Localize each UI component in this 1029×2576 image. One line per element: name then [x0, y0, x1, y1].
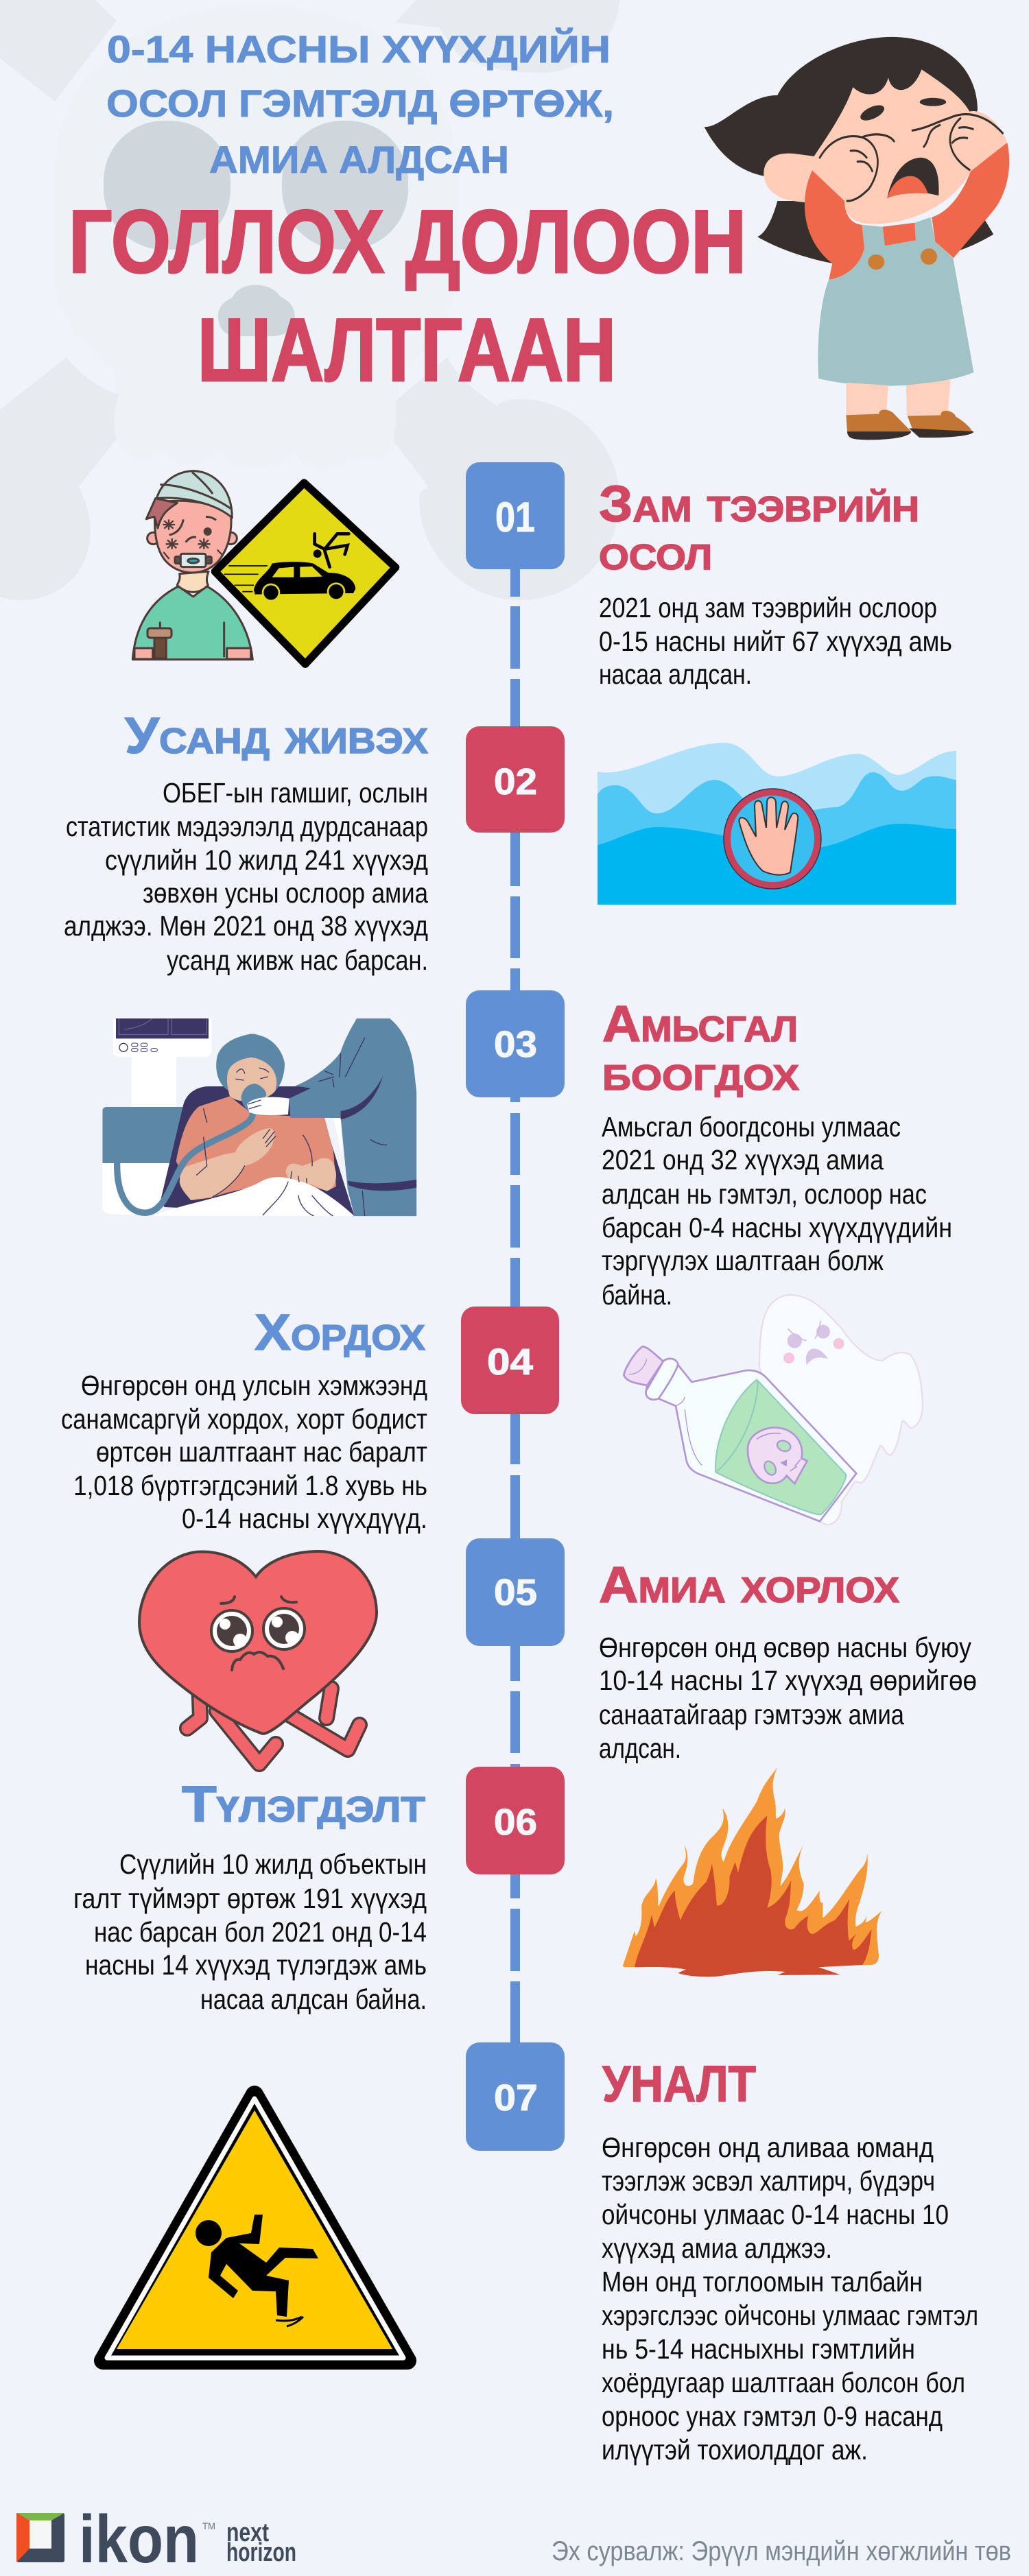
text: 06 burns [73, 1848, 427, 2015]
text: 02 drowning: алджээ. Мөн 2021 онд 38 хүүхэд [64, 910, 428, 942]
text: 07 falls: хоёрдугаар шалтгаан болсон бол [602, 2367, 965, 2398]
text: 04 poisoning [61, 1370, 427, 1534]
number badge 01: 01 [495, 494, 535, 540]
illustration: flames [623, 1767, 882, 1977]
text: 03 choking: 2021 онд 32 хүүхэд амиа [602, 1144, 884, 1176]
text: 05 suicide: алдсан. [599, 1732, 681, 1764]
number badge 04 [461, 1307, 559, 1414]
title: main heading: ГОЛЛОХ ДОЛООН [69, 191, 746, 291]
text: 07 falls: орноос унах гэмтэл 0-9 насанд [602, 2400, 943, 2432]
illustration: crying girl [705, 37, 1009, 440]
logo: ikon next horizon: ikon [79, 2501, 199, 2576]
text: 07 falls: ойчсоны улмаас 0-14 насны 10 [602, 2199, 949, 2230]
illustration: road accident [132, 471, 396, 664]
text: 07 falls: нь 5-14 насныхны гэмтлийн [602, 2333, 915, 2365]
logo: ikon next horizon [16, 2501, 296, 2576]
title: main heading [69, 191, 746, 400]
text: 02 drowning: зөвхөн усны ослоор амиа [143, 877, 428, 909]
text: 02 drowning: ОБЕГ-ын гамшиг, ослын [163, 777, 428, 809]
text: 07 falls: Өнгөрсөн онд аливаа юманд [602, 2132, 934, 2163]
text: 06 burns: галт түймэрт өртөж 191 хүүхэд [73, 1883, 427, 1914]
number badge 06 [466, 1767, 565, 1874]
heading: 07 falls: УНАЛТ [602, 2055, 756, 2112]
text: 05 suicide [599, 1632, 977, 1764]
text: 06 burns: насны 14 хүүхэд түлэгдэж амь [85, 1949, 427, 1981]
heading: 01 road accident: Зам тээврийн [599, 475, 919, 532]
heading: 03 choking [602, 995, 799, 1101]
text: 07 falls: илүүтэй тохиолддог аж. [602, 2434, 868, 2466]
title: subtitle lines [106, 27, 614, 181]
number badge 02: 02 [494, 761, 537, 802]
text: 03 choking [602, 1111, 952, 1311]
text: 07 falls [602, 2132, 978, 2466]
text: 07 falls: тээглэж эсвэл халтирч, бүдэрч [602, 2165, 935, 2197]
text: 03 choking: алдсан нь гэмтэл, ослоор нас [602, 1178, 927, 1210]
text: 05 suicide: санаатайгаар гэмтээж амиа [599, 1699, 904, 1730]
logo: ikon next horizon: TM [202, 2520, 215, 2531]
title: subtitle lines: ОСОЛ ГЭМТЭЛД ӨРТӨЖ, [106, 82, 614, 125]
text: 04 poisoning: 1,018 бүртгэгдсэний 1.8 хувь нь [73, 1470, 427, 1501]
title: subtitle lines: 0-14 НАСНЫ ХҮҮХДИЙН [107, 27, 611, 71]
background skull pattern [0, 0, 619, 600]
number badge 07 [466, 2042, 565, 2151]
text: 03 choking: барсан 0-4 насны хүүхдүүдийн [602, 1212, 952, 1243]
injured man [132, 471, 252, 660]
heading: 03 choking: Амьсгал [602, 995, 798, 1052]
text: 07 falls: хүүхэд амиа алджээ. [602, 2232, 832, 2264]
number badge 01 [466, 462, 565, 569]
text: 05 suicide: 10-14 насны 17 хүүхэд өөрийгөө [599, 1665, 977, 1696]
text: 03 choking: байна. [602, 1279, 672, 1311]
title: subtitle lines: АМИА АЛДСАН [209, 138, 509, 181]
text: 01 road accident: насаа алдсан. [599, 658, 752, 690]
heading: 06 burns: Түлэгдэлт [182, 1776, 425, 1833]
text: 07 falls: Мөн онд тоглоомын талбайн [602, 2266, 923, 2298]
text: 04 poisoning: санамсаргүй хордох, хорт бодист [61, 1403, 427, 1435]
text: 02 drowning: статистик мэдээлэлд дурдсанаар [66, 811, 428, 842]
text: 06 burns: нас барсан бол 2021 онд 0-14 [94, 1916, 427, 1948]
heading: 01 road accident [599, 475, 919, 580]
number badge 04: 04 [487, 1341, 533, 1383]
logo: ikon next horizon: horizon [226, 2538, 296, 2567]
text: 02 drowning: сүүлийн 10 жилд 241 хүүхэд [105, 844, 428, 876]
number badge 05 [466, 1538, 565, 1646]
text: 05 suicide: Өнгөрсөн онд өсвөр насны буюу [599, 1632, 971, 1663]
number badge 06: 06 [494, 1802, 537, 1843]
heading: 01 road accident: осол [599, 523, 712, 580]
number badge 05: 05 [494, 1572, 537, 1613]
heading: 02 drowning: Усанд живэх [125, 707, 428, 764]
text: 01 road accident: 0-15 насны нийт 67 хүүхэд амь [599, 625, 952, 657]
text: 01 road accident: 2021 онд зам тээврийн ослоор [599, 592, 937, 623]
logo: ikon next horizon: next [226, 2518, 269, 2547]
heading: 04 poisoning: Хордох [255, 1304, 425, 1361]
number badge 02 [466, 726, 565, 833]
text: 02 drowning [64, 777, 428, 976]
text: 03 choking: Амьсгал боогдсоны улмаас [602, 1111, 901, 1143]
text: 02 drowning: усанд живж нас барсан. [167, 944, 428, 976]
timeline [510, 569, 520, 2043]
heading: 05 suicide: Амиа хорлох [599, 1556, 899, 1613]
illustration: patient with oxygen mask [102, 1013, 416, 1216]
text: 06 burns: насаа алдсан байна. [200, 1983, 427, 2015]
number badge 03 [466, 990, 565, 1097]
number badge 03: 03 [494, 1024, 537, 1065]
icon: slippery warning triangle [103, 2095, 407, 2361]
text: 06 burns: Сүүлийн 10 жилд объектын [119, 1848, 427, 1880]
heading: 03 choking: боогдох [602, 1044, 799, 1101]
number badge 07: 07 [494, 2077, 538, 2119]
text: 03 choking: тэргүүлэх шалтгаан болж [602, 1245, 884, 1276]
title: main heading: ШАЛТГААН [198, 300, 616, 400]
text: 04 poisoning: өртсөн шалтгаант нас баралт [96, 1436, 427, 1468]
text: 04 poisoning: Өнгөрсөн онд улсын хэмжээнд [81, 1370, 427, 1401]
illustration: poison bottle and ghost [624, 1295, 923, 1525]
illustration: water with stop hand [598, 743, 956, 905]
text: 01 road accident [599, 592, 952, 690]
illustration: sad heart [139, 1551, 377, 1764]
text: 04 poisoning: 0-14 насны хүүхдүүд. [182, 1503, 427, 1534]
